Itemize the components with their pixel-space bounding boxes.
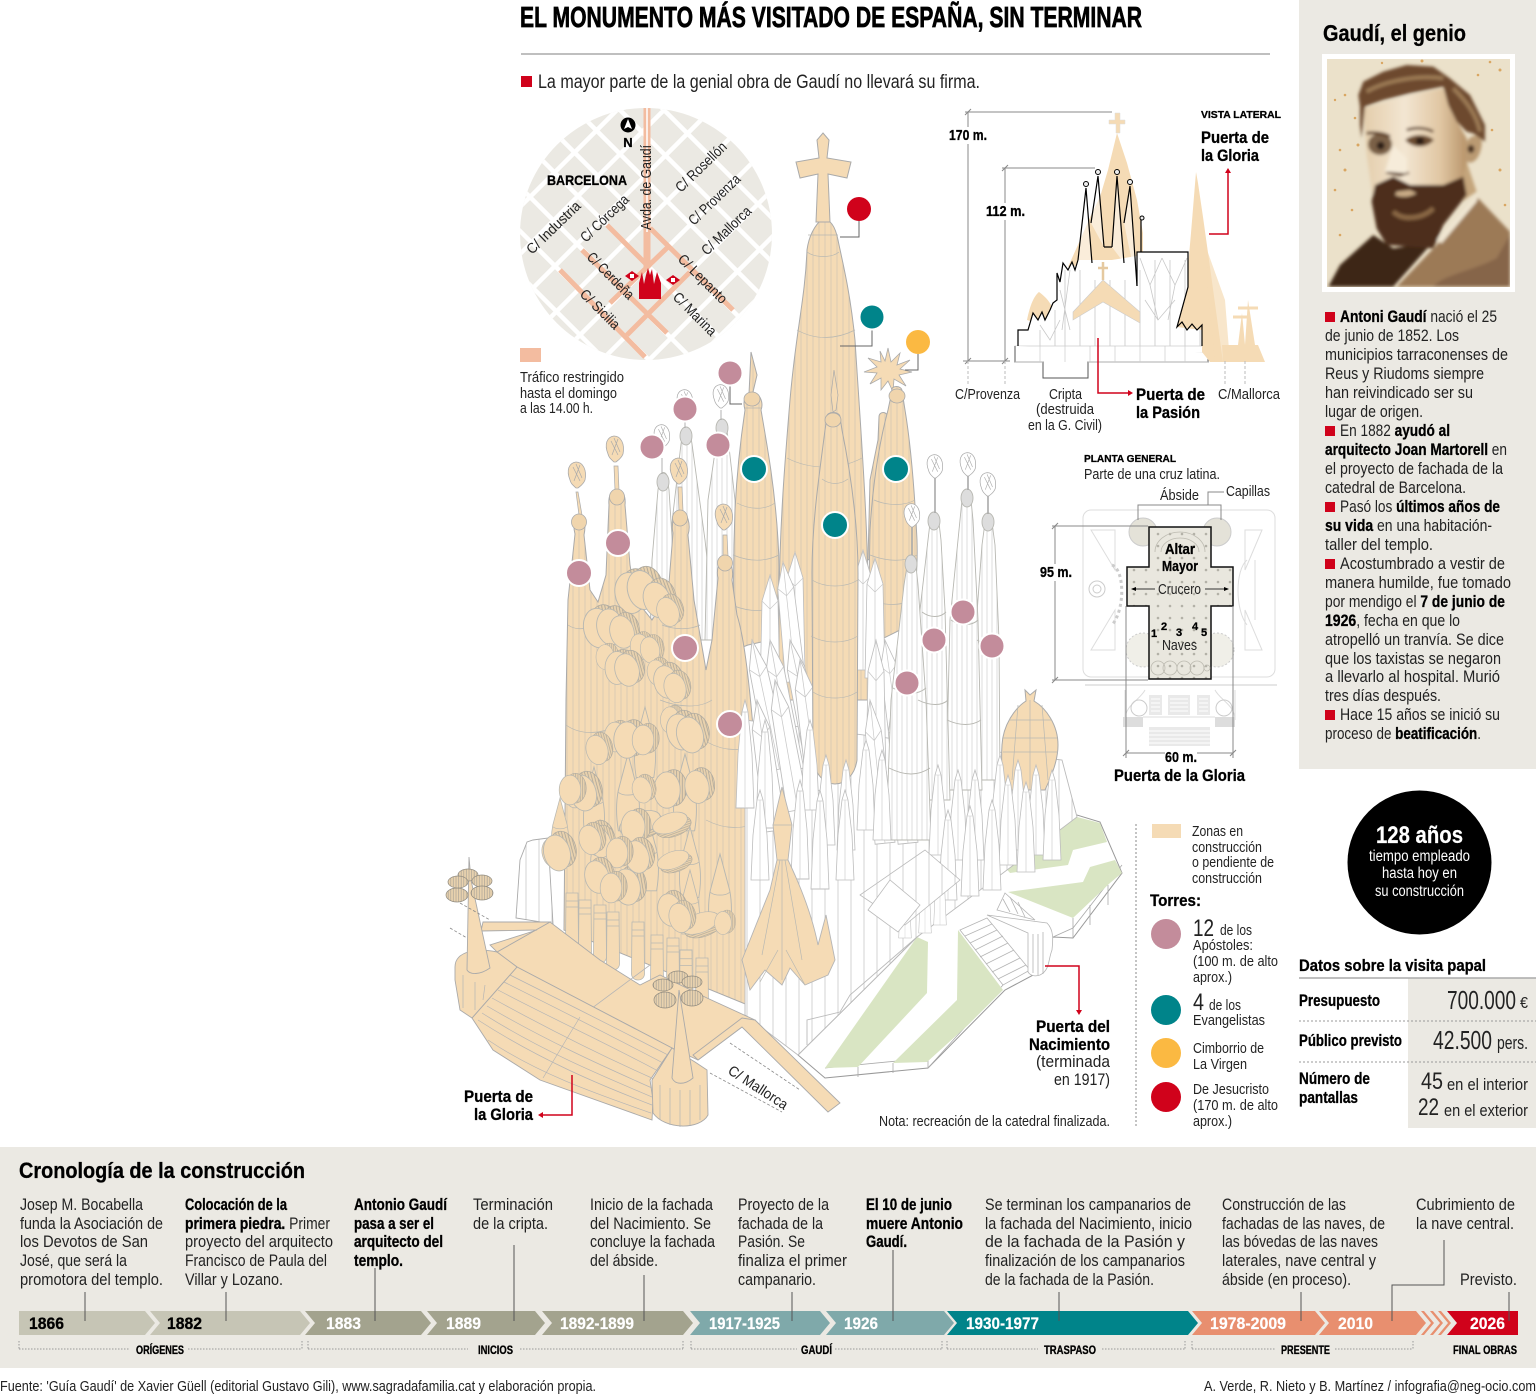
callout: 128 años: hasta hoy en (1382, 865, 1457, 882)
timeline leader lines (85, 1240, 1509, 1321)
timeline text: 2010 (1416, 1196, 1515, 1233)
biography text: arquitecto Joan Martorell en (1325, 441, 1507, 459)
timeline text: 1978-2009: ábside (en proceso). (1222, 1271, 1351, 1289)
red arrows (1098, 168, 1231, 396)
timeline bar: 1978-2009 (1210, 1314, 1286, 1333)
timeline text: 1926 (866, 1196, 963, 1251)
timeline text: 1978-2009: las bóvedas de las naves (1222, 1233, 1378, 1251)
callout: 128 años: tiempo empleado (1369, 848, 1470, 865)
plan interior details (1151, 532, 1210, 675)
timeline text: 1926: Gaudí. (866, 1233, 907, 1251)
biography text: 1926, fecha en que lo (1325, 612, 1460, 630)
label: Puerta del Nacimiento (1029, 966, 1111, 1089)
label: Puerta de la Gloria: Puerta de (464, 1088, 533, 1106)
peach platform (455, 857, 840, 1127)
plan labels: 1 (1151, 628, 1157, 640)
icon: cathedral (639, 268, 661, 299)
timeline text: 1978-2009: laterales, nave central y (1222, 1252, 1377, 1270)
side elevation labels: 170 m. (949, 127, 987, 144)
icon: north (620, 118, 636, 150)
legend: construcción (1192, 839, 1262, 856)
side elevation labels (947, 109, 1282, 434)
panel: Datos sobre la visita papal: 22 (1418, 1094, 1439, 1121)
biography text: tres días después. (1325, 687, 1441, 705)
left white building (516, 838, 553, 924)
plan labels: PLANTA GENERAL (1084, 453, 1177, 465)
timeline text: 1889 (473, 1196, 553, 1233)
timeline text: 1930-1977: la fachada del Nacimiento, inicio (985, 1215, 1192, 1233)
timeline text: 1883 (354, 1196, 448, 1270)
timeline text: 1930-1977 (985, 1196, 1192, 1289)
legend: de los (1220, 922, 1252, 939)
legend: Apóstoles: (1193, 937, 1253, 954)
plan drawing (1083, 510, 1277, 720)
map labels: C/ Córcega (578, 191, 633, 246)
callout: 128 años: su construcción (1375, 883, 1464, 900)
legend: La Virgen (1193, 1056, 1247, 1073)
callout: 128 años (1348, 790, 1492, 934)
panel: Datos sobre la visita papal: Público previsto (1299, 1032, 1402, 1050)
tower: evangelista derecha (868, 386, 917, 640)
timeline bar: 1917-1925 (709, 1314, 780, 1333)
biography text: el proyecto de fachada de la (1325, 460, 1504, 478)
plan labels: Parte de una cruz latina. (1084, 466, 1220, 483)
panel: Datos sobre la visita papal: Número de (1299, 1070, 1370, 1088)
timeline text: 2026: Previsto. (1460, 1271, 1517, 1289)
label: 95 m.: 95 m. (1040, 565, 1072, 581)
map legend (520, 348, 624, 417)
timeline bar: 1866 (29, 1314, 64, 1333)
timeline text: 1882: proyecto del arquitecto (185, 1233, 333, 1251)
panel: Datos sobre la visita papal: € (1520, 995, 1528, 1012)
biography text: municipios tarraconenses de (1325, 346, 1508, 364)
side elevation labels: 112 m. (986, 203, 1025, 220)
plan dimensions (1052, 492, 1236, 758)
timeline text: 1917-1925 (738, 1196, 847, 1289)
portrait (1322, 54, 1515, 292)
street C/ Mallorca: C/ Mallorca (725, 1063, 791, 1114)
side elevation labels: Puerta de (1136, 386, 1205, 404)
stairs (960, 893, 1053, 985)
panel: Datos sobre la visita papal: 42.500 (1433, 1025, 1492, 1055)
map labels: C/ Sicilia (576, 287, 623, 334)
biography text: En 1882 ayudó al (1340, 422, 1450, 440)
side elevation labels: C/Mallorca (1218, 386, 1281, 403)
map labels: C/ Cerdeña (583, 250, 637, 304)
timeline text: 1926: muere Antonio (866, 1215, 963, 1233)
panel: Datos sobre la visita papal (1299, 957, 1536, 1128)
side elevation labels: Cripta (1049, 386, 1083, 403)
main cathedral illustration (446, 133, 1122, 1127)
plan labels: Mayor (1162, 559, 1198, 575)
tower: evangelista izquierda (733, 352, 779, 650)
period brackets: ORÍGENES (136, 1344, 184, 1357)
side elevation drawing (1015, 113, 1265, 378)
white platform right (798, 815, 1122, 1078)
period brackets: GAUDÍ (801, 1344, 833, 1357)
timeline bar: 1883 (326, 1314, 361, 1333)
biography text: taller del templo. (1325, 536, 1433, 554)
plan labels: Altar (1165, 542, 1195, 558)
map labels: C/ Mallorca (699, 203, 756, 259)
plan labels: Capillas (1226, 483, 1270, 500)
side elevation labels: VISTA LATERAL (1201, 109, 1282, 121)
period brackets: FINAL OBRAS (1453, 1345, 1517, 1357)
label: Puerta del Nacimiento: Nacimiento (1029, 1036, 1110, 1054)
timeline heading: Cronología de la construcción (19, 1158, 305, 1183)
marker: Jesucristo (847, 197, 871, 221)
timeline text: 1882: Francisco de Paula del (185, 1252, 327, 1270)
timeline bar (19, 1311, 1518, 1335)
side elevation labels: la Gloria (1201, 147, 1260, 165)
panel: Barcelona map (520, 108, 772, 413)
timeline text: 1892-1899 (590, 1196, 716, 1270)
plan labels: Crucero (1158, 581, 1201, 598)
timeline text: 1866: José, que será la (20, 1252, 128, 1270)
dome (1002, 690, 1058, 790)
legend: de los (1209, 997, 1241, 1014)
panel: vista lateral (947, 109, 1282, 434)
biography text: Reus y Riudoms siempre (1325, 365, 1484, 383)
label: Puerta del Nacimiento: (terminada (1036, 1053, 1111, 1071)
side elevation labels: la Pasión (1136, 404, 1200, 422)
period brackets: TRASPASO (1044, 1345, 1096, 1357)
plan labels: Puerta de la Gloria (1114, 767, 1246, 785)
timeline text: 1866: Josep M. Bocabella (20, 1196, 144, 1214)
panel: Datos sobre la visita papal: 45 (1421, 1068, 1443, 1095)
disc cluster (538, 563, 736, 1016)
legend: 4 (1193, 989, 1204, 1016)
street C/ Mallorca (450, 903, 800, 1114)
panel: Datos sobre la visita papal: Presupuesto (1299, 992, 1380, 1010)
biography text: Pasó los últimos años de (1340, 498, 1500, 516)
marker: Virgen (906, 330, 930, 354)
white finials right (904, 453, 996, 527)
biography text: Acostumbrado a vestir de (1340, 555, 1505, 573)
label: Puerta del Nacimiento: en 1917) (1054, 1071, 1110, 1089)
biography text: lugar de origen. (1325, 403, 1423, 421)
map legend: a las 14.00 h. (520, 400, 593, 417)
biography text: por mendigo el 7 de junio de (1325, 593, 1505, 611)
timeline text: 1892-1899: del Nacimiento. Se (590, 1215, 711, 1233)
callout: 128 años: 128 años (1376, 822, 1463, 849)
legend: construcción (1192, 870, 1262, 887)
panel: timeline (0, 1147, 1536, 1368)
biography text: a llevarlo al hospital. Murió (1325, 668, 1500, 686)
plan labels: 4 (1192, 621, 1199, 633)
timeline text: 1930-1977: de la fachada de la Pasión y (985, 1233, 1186, 1251)
legend: aprox.) (1193, 969, 1232, 986)
timeline text: 1930-1977: Se terminan los campanarios de (985, 1196, 1191, 1214)
icon: north: N (623, 135, 633, 150)
timeline text: 1917-1925: fachada de la (738, 1215, 824, 1233)
timeline text: 1930-1977: finalización de los campanarios (985, 1252, 1185, 1270)
label: Puerta de la Gloria: la Gloria (474, 1106, 534, 1124)
biography text: catedral de Barcelona. (1325, 479, 1466, 497)
map labels: C/ Marina (669, 290, 720, 340)
legend: Evangelistas (1193, 1012, 1265, 1029)
timeline text: 1917-1925: Pasión. Se (738, 1233, 805, 1251)
timeline text: 2010: la nave central. (1416, 1215, 1514, 1233)
timeline text: 1866 (20, 1196, 163, 1289)
green gardens (825, 817, 1122, 1068)
biography text (1325, 308, 1511, 743)
panel: Datos sobre la visita papal: pers. (1497, 1033, 1528, 1053)
timeline text: 1883: templo. (354, 1252, 403, 1270)
back white towers (650, 410, 738, 640)
side elevation labels: (destruida (1036, 401, 1095, 418)
right flower (653, 971, 703, 1008)
timeline text: 1882 (185, 1196, 333, 1289)
timeline bar: 1882 (167, 1314, 202, 1333)
legend: aprox.) (1193, 1113, 1232, 1130)
left flower (446, 869, 493, 902)
biography text: de junio de 1852. Los (1325, 327, 1459, 345)
biography text: proceso de beatificación. (1325, 725, 1481, 743)
timeline text: 1917-1925: finaliza el primer (738, 1252, 847, 1270)
label: Puerta del Nacimiento: Puerta del (1036, 1018, 1110, 1036)
timeline text: 1883: Antonio Gaudí (354, 1196, 448, 1214)
panel: Datos sobre la visita papal: Datos sobre la visita papal (1299, 957, 1486, 975)
legend: (170 m. de alto (1193, 1097, 1278, 1114)
front peach spire (742, 787, 835, 990)
legend (1136, 823, 1278, 1130)
legend: Cimborrio de (1193, 1040, 1264, 1057)
timeline text: 1892-1899: del ábside. (590, 1252, 658, 1270)
biography text: han reivindicado ser su (1325, 384, 1473, 402)
timeline bar: 2010 (1338, 1314, 1373, 1333)
markers: evangelists (741, 304, 909, 538)
plan labels: Naves (1162, 637, 1197, 654)
timeline text: 1882: Colocación de la (185, 1196, 288, 1214)
subtitle: La mayor parte de la genial obra de Gaudí no llevará su firma. (538, 72, 980, 93)
map labels (524, 139, 756, 340)
legend: o pendiente de (1192, 854, 1274, 871)
map legend: Tráfico restringido (520, 369, 624, 386)
markers: apostles (566, 360, 1004, 737)
side elevation labels: C/Provenza (955, 386, 1021, 403)
timeline text: 1866: los Devotos de San (20, 1233, 148, 1251)
map labels: BARCELONA (547, 172, 627, 188)
timeline text: 1883: arquitecto del (354, 1233, 443, 1251)
map labels: C/ Provenza (686, 171, 745, 229)
map legend: hasta el domingo (520, 385, 617, 402)
tower leaders (730, 221, 918, 404)
period brackets: PRESENTE (1281, 1345, 1330, 1357)
dimension lines (963, 109, 1245, 385)
map labels: Avda. de Gaudí (639, 145, 655, 230)
timeline bar: 2026 (1470, 1314, 1505, 1333)
plan labels (1084, 453, 1270, 785)
legend: Torres: (1150, 892, 1201, 910)
apostle towers left (564, 436, 765, 1010)
plan labels: 60 m. (1165, 750, 1197, 766)
panel: Datos sobre la visita papal: pantallas (1299, 1089, 1358, 1107)
white pinnacles (736, 700, 1061, 1045)
timeline text: 1882: Villar y Lozano. (185, 1271, 283, 1289)
timeline text: 1978-2009 (1222, 1196, 1385, 1289)
plan cross (1127, 527, 1233, 679)
title: EL MONUMENTO MÁS VISITADO DE ESPAÑA, SIN TERMINAR (520, 0, 1142, 34)
white apostle towers right (886, 470, 1000, 840)
timeline text: 1978-2009: fachadas de las naves, de (1222, 1215, 1385, 1233)
panel: planta general (1038, 453, 1277, 785)
timeline text: 1978-2009: Construcción de las (1222, 1196, 1346, 1214)
biography text: su vida en una habitación- (1325, 517, 1492, 535)
biography text: que los taxistas se negaron (1325, 650, 1501, 668)
tower: Jesucristo (779, 133, 868, 700)
side elevation labels: Puerta de (1201, 129, 1269, 147)
timeline text: 1866: promotora del templo. (20, 1271, 163, 1289)
map labels: C/ Lepanto (674, 252, 730, 307)
timeline bar: 1889 (446, 1314, 481, 1333)
timeline text: 1930-1977: de la fachada de la Pasión. (985, 1271, 1154, 1289)
timeline bar: 1892-1899 (560, 1314, 634, 1333)
timeline text: 1892-1899: Inicio de la fachada (590, 1196, 714, 1214)
side elevation labels: en la G. Civil) (1028, 417, 1102, 434)
map labels: C/ Rosellón (673, 139, 731, 196)
timeline bar: 1926 (844, 1314, 878, 1333)
timeline text: 1889: de la cripta. (473, 1215, 548, 1233)
biography text: atropelló un tranvía. Se dice (1325, 631, 1504, 649)
biography text: Hace 15 años se inició su (1340, 706, 1500, 724)
legend: De Jesucristo (1193, 1081, 1269, 1098)
plan labels: 2 (1161, 621, 1167, 633)
tower: Cimborrio star (864, 348, 912, 560)
timeline text: 2010: Cubrimiento de (1416, 1196, 1515, 1214)
timeline bar: 1930-1977 (966, 1314, 1039, 1333)
timeline text: 1866: funda la Asociación de (20, 1215, 163, 1233)
panel: Gaudí, el genio: Gaudí, el genio (1323, 20, 1466, 46)
icon: metro (625, 271, 680, 285)
timeline text: 1883: pasa a ser el (354, 1215, 434, 1233)
panel: Gaudí, el genio (1299, 0, 1536, 769)
tower: evangelista centro (811, 370, 858, 784)
timeline text: 1926: El 10 de junio (866, 1196, 952, 1214)
plan labels: 5 (1201, 627, 1207, 639)
timeline text: 1892-1899: concluye la fachada (590, 1233, 716, 1251)
timeline text: 1917-1925: campanario. (738, 1271, 816, 1289)
timeline text: 1882: primera piedra. Primer (185, 1215, 330, 1233)
note: Nota: recreación de la catedral finalizada. (879, 1113, 1110, 1130)
legend: (100 m. de alto (1193, 953, 1278, 970)
biography text: Antoni Gaudí nació el 25 (1340, 308, 1497, 326)
legend: Zonas en (1192, 823, 1243, 840)
biography text: manera humilde, fue tomado (1325, 574, 1511, 592)
plan labels: Ábside (1160, 487, 1199, 504)
white finials (654, 385, 729, 448)
map labels: C/ Industria (524, 198, 585, 258)
timeline text: 1889: Terminación (473, 1196, 553, 1214)
period brackets: INICIOS (478, 1345, 513, 1357)
white crystal shards (741, 550, 918, 844)
timeline text: 1917-1925: Proyecto de la (738, 1196, 830, 1214)
plan labels: 3 (1176, 627, 1182, 639)
legend: 12 (1193, 915, 1214, 942)
period brackets (19, 1341, 1517, 1357)
label: Puerta de la Gloria (464, 1075, 572, 1124)
white wall (745, 720, 1077, 1055)
